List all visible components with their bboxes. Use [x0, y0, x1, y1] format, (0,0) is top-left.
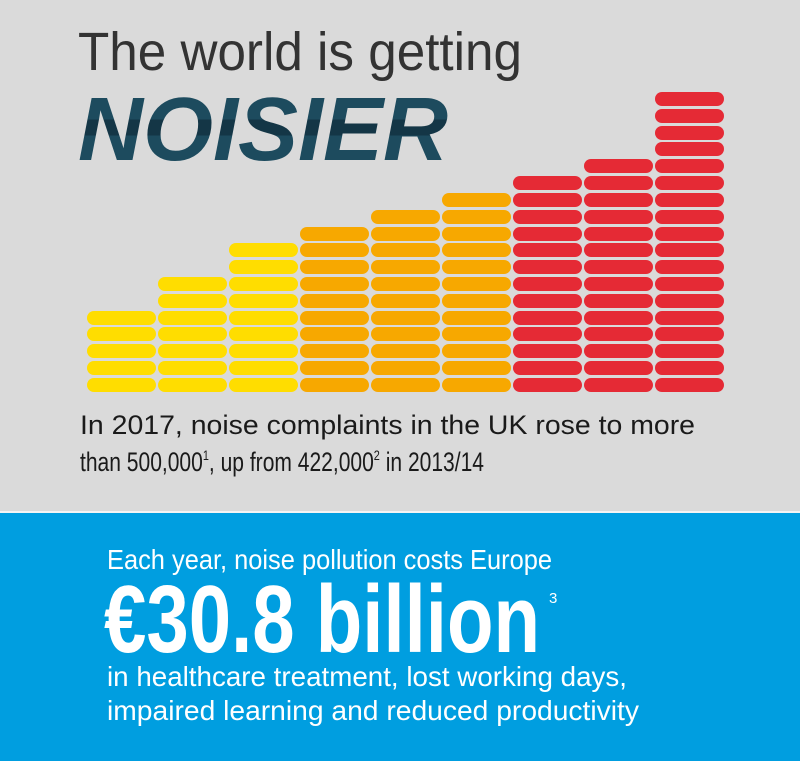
panel: Europe cost: Each year, noise pollution costs Europe	[107, 544, 552, 575]
text block: UK complaints: 2	[374, 447, 380, 463]
text block: UK complaints: in 2013/14	[380, 447, 484, 477]
text block: UK complaints: 1	[203, 447, 209, 463]
text block: UK complaints	[80, 410, 695, 477]
big number: €30.8 billion	[104, 566, 540, 673]
panel: Europe cost: impaired learning and reduced productivity	[107, 695, 639, 726]
title: The world is getting	[78, 22, 522, 82]
text block: UK complaints: than 500,000	[80, 447, 238, 477]
bar chart: rising noise levels	[87, 92, 724, 392]
panel: Europe cost	[0, 511, 800, 761]
panel: Europe cost: 3	[549, 590, 557, 607]
text block: UK complaints: , up from 422,000	[209, 447, 374, 477]
text block: UK complaints: In 2017, noise complaints in the UK rose to more	[80, 410, 695, 440]
panel: Europe cost: in healthcare treatment, lost working days,	[107, 661, 627, 692]
title	[78, 22, 522, 180]
title: NOISIER: NOISIER	[78, 80, 448, 180]
